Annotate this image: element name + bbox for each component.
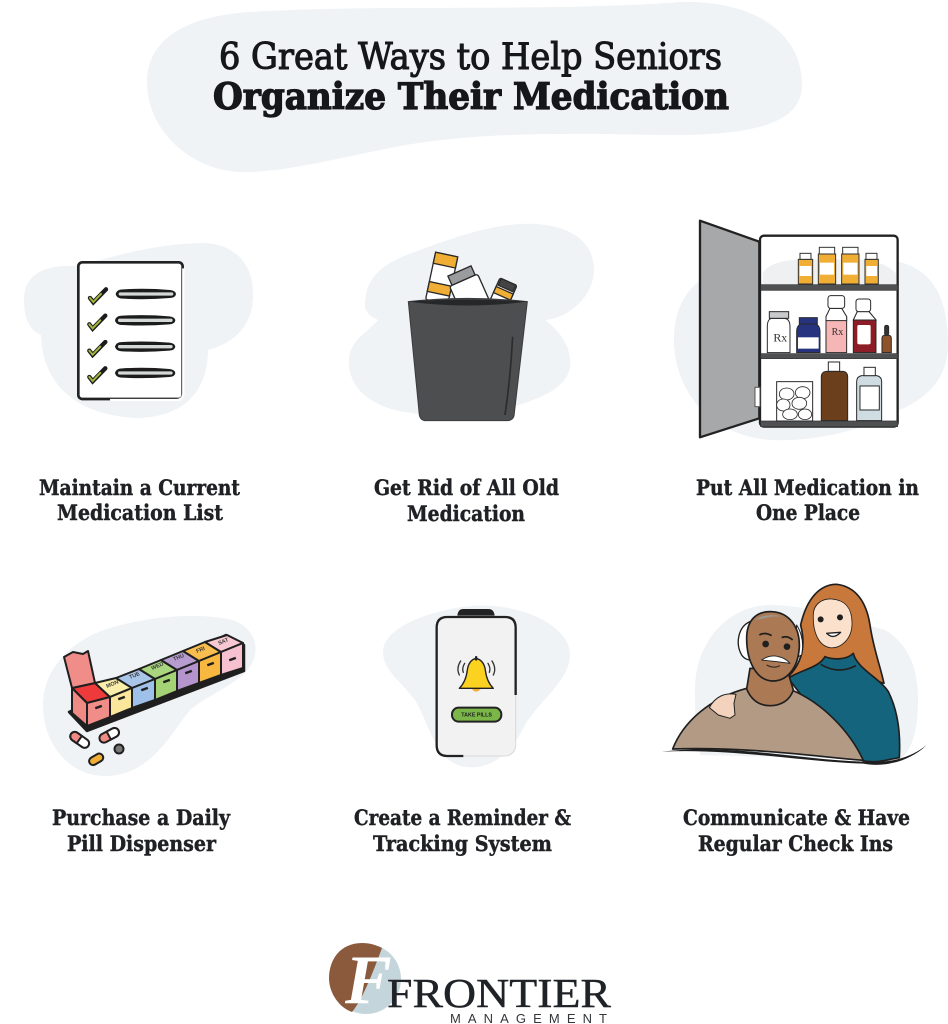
- bottom shelf containers: [777, 362, 882, 421]
- pills: [69, 730, 91, 750]
- day labels: SAT: [218, 637, 230, 647]
- label: Tracking System: [373, 831, 552, 856]
- man neck: [747, 668, 793, 706]
- panel: reminder system: [354, 606, 571, 856]
- panel: old medication: [349, 224, 594, 526]
- man ear hair: [738, 622, 755, 660]
- day labels: FRI: [196, 646, 206, 655]
- Rx marks: Rx: [832, 327, 843, 338]
- label: [683, 805, 910, 856]
- icon: trash bin with bottles: [408, 252, 527, 421]
- day labels: [106, 637, 230, 690]
- label: Create a Reminder &: [354, 805, 571, 830]
- background blob: [383, 606, 570, 767]
- ground curve: [662, 745, 927, 765]
- label: [52, 805, 231, 856]
- hand: [709, 694, 736, 718]
- label: [374, 475, 559, 526]
- label: Put All Medication in: [696, 475, 919, 500]
- label: Communicate & Have: [683, 805, 910, 830]
- days: [95, 678, 132, 697]
- label: [39, 475, 240, 525]
- top shelf bottles: [798, 247, 878, 284]
- door: [700, 221, 759, 437]
- icon: trash bin with bottles: Rx: [463, 297, 477, 310]
- shelves: [761, 285, 898, 427]
- panel: pill dispenser: [43, 616, 256, 856]
- logo mark: [329, 942, 401, 1019]
- woman sweater: [788, 653, 900, 762]
- title background blob: [147, 2, 802, 172]
- panel: medication list: [24, 243, 253, 525]
- label: Get Rid of All Old: [374, 475, 559, 500]
- title panel: [147, 2, 802, 172]
- man sweater: [673, 688, 863, 760]
- illustration: two people: [662, 584, 927, 765]
- icon: phone with bell: TAKE PILLS: [461, 713, 492, 719]
- Rx marks: [773, 327, 843, 345]
- background blob: [349, 224, 594, 416]
- day labels: MON: [106, 679, 120, 690]
- icon: pill box: [64, 635, 244, 767]
- middle shelf bottles: [767, 296, 891, 353]
- label: [696, 475, 919, 525]
- open compartment: [72, 683, 110, 703]
- base shadow: [69, 635, 244, 731]
- logo mark: F: [344, 942, 392, 1019]
- label: Medication List: [57, 500, 223, 525]
- label: [354, 805, 571, 856]
- take pills button: [452, 708, 501, 722]
- Rx marks: Rx: [773, 331, 787, 345]
- panel: medicine cabinet: [674, 221, 948, 525]
- title text: [213, 37, 729, 118]
- background blob: [674, 254, 948, 440]
- icon: phone with bell: [437, 609, 516, 756]
- day labels: WED: [151, 661, 165, 672]
- wordmark: FRONTIER: [387, 970, 612, 1016]
- label: Maintain a Current: [39, 475, 240, 500]
- woman face: [813, 599, 852, 648]
- label: Purchase a Daily: [52, 805, 231, 830]
- logo: Frontier Management: [329, 942, 612, 1024]
- title text: Organize Their Medication: [213, 76, 729, 118]
- man head: [747, 612, 799, 681]
- title text: 6 Great Ways to Help Seniors: [219, 37, 722, 78]
- day labels: TUE: [129, 671, 141, 681]
- label: Pill Dispenser: [67, 831, 217, 856]
- label: Medication: [407, 501, 525, 526]
- woman hair: [788, 584, 884, 683]
- panel: communicate: [662, 584, 927, 856]
- background blob: [43, 616, 256, 776]
- latches: [95, 657, 236, 709]
- icon: checklist: [78, 262, 183, 400]
- background blob: [695, 605, 918, 760]
- label: Regular Check Ins: [698, 831, 893, 856]
- label: One Place: [756, 500, 860, 525]
- day labels: THU: [173, 653, 185, 663]
- background blob: [24, 243, 253, 418]
- icon: open cabinet: [700, 221, 898, 437]
- bell: [459, 658, 493, 688]
